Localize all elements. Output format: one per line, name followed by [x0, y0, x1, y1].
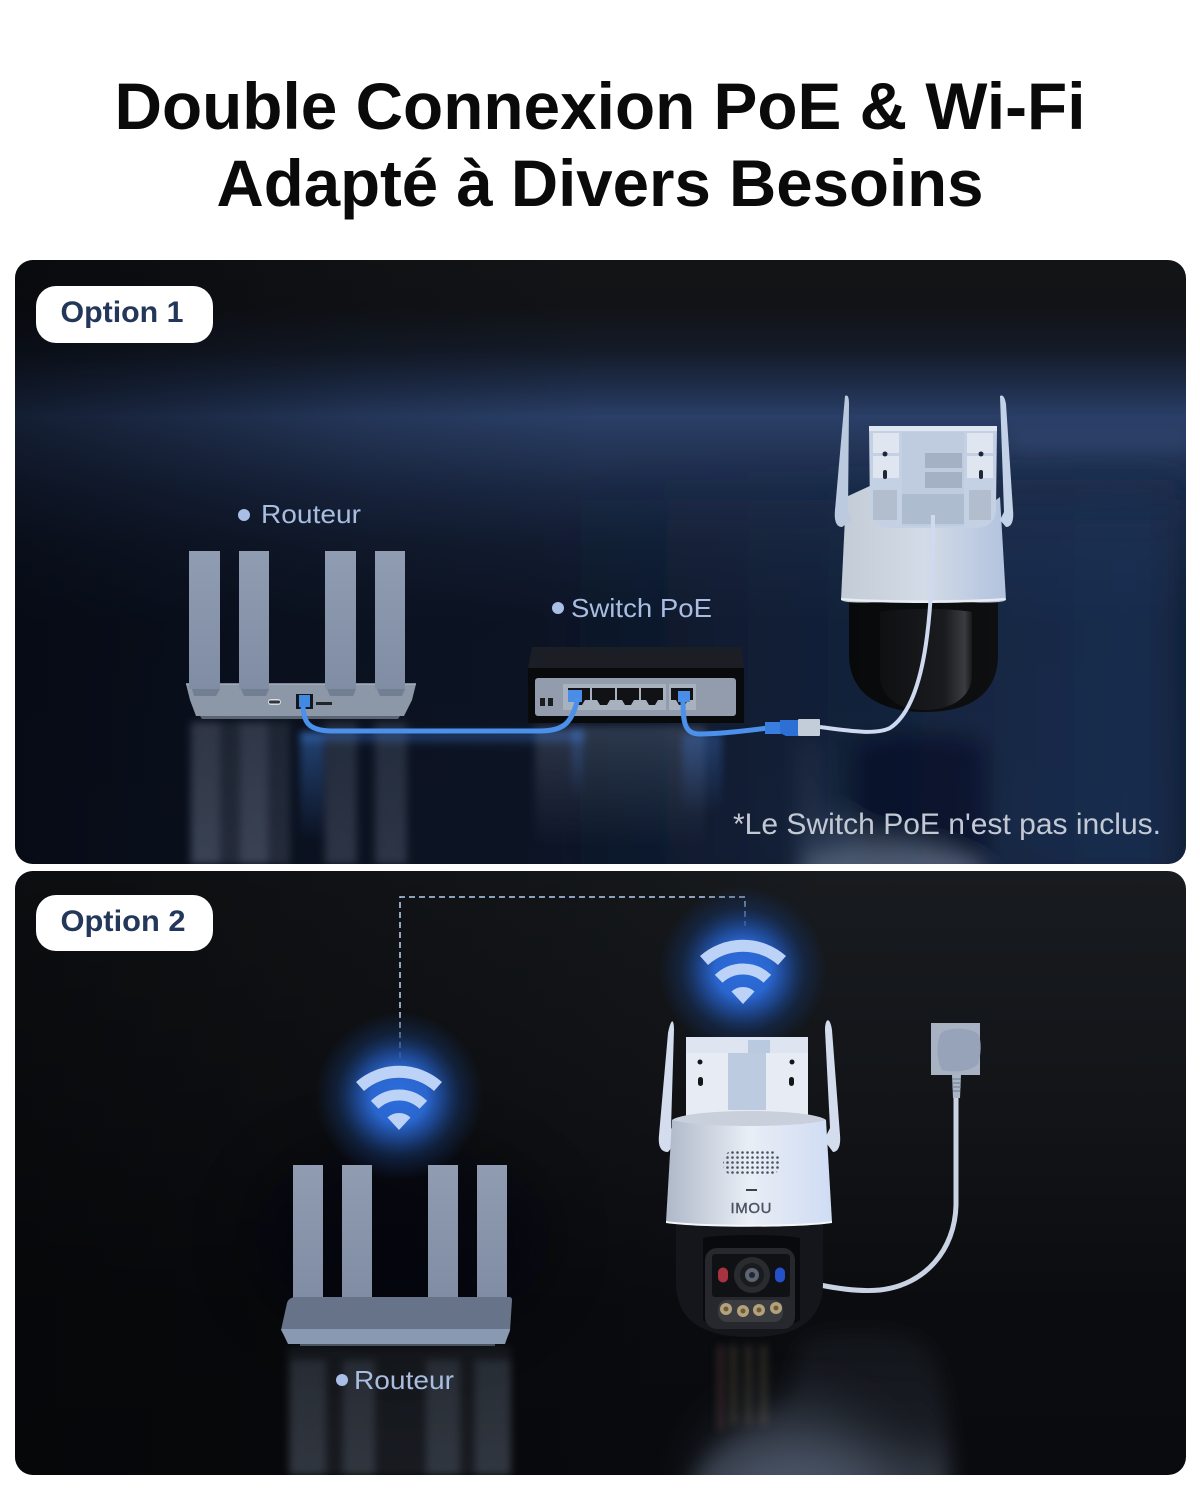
title: Adapté à Divers Besoins — [216, 146, 984, 220]
lens module — [703, 1235, 800, 1329]
router and switch reflections — [190, 722, 722, 864]
title: Double Connexion PoE & Wi-Fi — [114, 69, 1086, 143]
blue cable switch to coupler — [683, 698, 768, 734]
title — [114, 69, 1086, 220]
panel: option 1 — [15, 260, 1190, 902]
badge: option 2: Option 2 — [60, 905, 186, 938]
dashed wifi link — [400, 897, 745, 1058]
label: routeur option 2: Routeur — [354, 1365, 454, 1395]
badge: option 1 — [36, 286, 213, 343]
lens led reflection — [717, 1345, 767, 1430]
label: switch poe — [552, 598, 711, 618]
router reflection — [288, 1346, 511, 1475]
brand logo: IMOU — [730, 1200, 772, 1217]
camera reflection — [687, 1340, 958, 1475]
white camera cable — [820, 515, 933, 732]
label: switch poe: Switch PoE — [571, 593, 712, 623]
camera reflection highlight — [710, 1415, 880, 1500]
router rear view — [186, 551, 416, 719]
poe switch — [528, 647, 744, 723]
camera front view — [659, 1020, 840, 1337]
blue cable router to switch — [303, 698, 578, 731]
speaker grille — [723, 1151, 779, 1174]
panel: option 2 — [15, 871, 1186, 1500]
router front view — [281, 1165, 512, 1346]
camera rear view — [835, 395, 1013, 712]
icon: wifi router — [315, 1012, 483, 1180]
footnote: *Le Switch PoE n'est pas inclus. — [733, 808, 1161, 841]
icon: wifi camera — [664, 891, 822, 1037]
power cable — [820, 1098, 956, 1291]
power plug — [931, 1023, 981, 1098]
badge: option 2 — [36, 895, 213, 951]
label: routeur option 2 — [336, 1371, 454, 1390]
label: routeur: Routeur — [261, 499, 361, 529]
badge: option 1: Option 1 — [60, 296, 184, 329]
coupler — [765, 719, 820, 736]
camera and coupler reflections — [791, 730, 991, 864]
label: routeur — [238, 505, 360, 524]
